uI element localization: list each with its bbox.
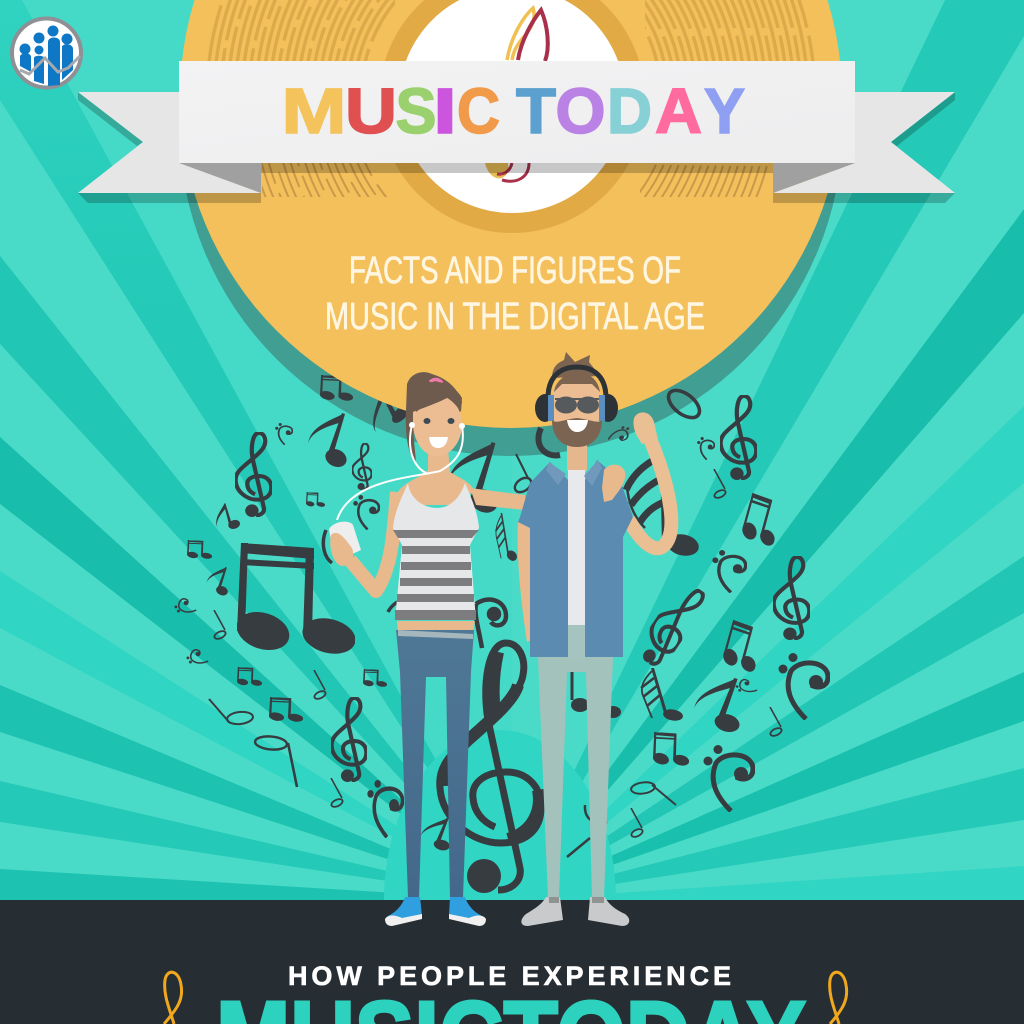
woman holding arm	[350, 492, 397, 591]
subtitle	[325, 250, 705, 338]
record label ring	[379, 0, 645, 233]
note: hollow right	[713, 469, 727, 499]
note: triple flag centre	[496, 513, 517, 562]
oval note over record edge	[664, 385, 704, 423]
note: tiny beamed	[305, 492, 326, 508]
title: A	[655, 75, 702, 147]
note: large flag centre	[448, 442, 501, 517]
note: beamed right	[738, 492, 786, 549]
man beard	[552, 418, 602, 447]
logo mark lower half	[485, 163, 529, 181]
woman neck and chest	[398, 448, 474, 505]
note: hollow behind shoulder	[512, 454, 534, 495]
icon: tiny bass clef rotated	[173, 596, 199, 618]
woman hair fringe	[416, 382, 462, 412]
phone	[329, 522, 361, 556]
left orange clef	[164, 972, 182, 1024]
subtitle line 1: FACTS AND FIGURES OF	[349, 250, 681, 292]
woman smile	[429, 437, 448, 448]
icon: tiny bass clef rotated lower	[185, 647, 211, 669]
title: D	[607, 75, 652, 147]
title: O	[556, 75, 606, 147]
note: near phone	[323, 530, 406, 612]
man neck	[567, 440, 587, 482]
title: T	[516, 75, 556, 147]
man t-shirt	[568, 470, 585, 626]
shirt collars	[546, 460, 602, 486]
note: beamed near woman	[362, 669, 388, 688]
trouser front	[568, 625, 585, 660]
note: hollow far right	[769, 707, 783, 737]
woman shoe right	[449, 897, 484, 923]
woman eyes	[424, 418, 454, 424]
note: beamed lower right	[651, 732, 690, 767]
headphone blue pads	[548, 395, 605, 421]
woman tank top	[393, 483, 479, 620]
note: large beamed notes	[232, 543, 359, 659]
note: hollow	[313, 670, 327, 700]
icon: bass clef near wire	[353, 495, 379, 529]
note: flag under record	[360, 385, 416, 443]
people icons	[20, 26, 73, 86]
woman shoe right sole	[449, 914, 486, 926]
tank stripes	[393, 530, 479, 620]
ribbon main panel	[179, 61, 855, 163]
man trousers	[538, 640, 613, 898]
man face	[553, 381, 600, 440]
vinyl record drop shadow	[179, 0, 843, 456]
icon: bass clef lower left	[367, 780, 403, 837]
man hair fringe	[554, 374, 600, 392]
ribbon notch shadows	[78, 92, 955, 146]
right orange clef	[830, 972, 847, 1024]
icon: treble clef right top	[721, 396, 756, 480]
man smile	[567, 420, 588, 432]
shoes	[385, 897, 629, 926]
icon: treble clef lower left	[332, 698, 366, 782]
man hair	[552, 352, 600, 378]
earphone wires	[337, 425, 463, 520]
note: hollow lowest right	[630, 808, 644, 838]
man raised hand	[633, 412, 658, 444]
man shirt left	[518, 462, 568, 657]
man shoe left	[521, 897, 563, 926]
man figure	[518, 352, 671, 898]
icon: small treble clef	[352, 444, 372, 490]
note: arcs behind head	[538, 428, 560, 455]
music notes cloud	[173, 375, 828, 893]
man shoe right	[588, 897, 629, 926]
icon: bass clef lower right	[704, 745, 753, 811]
note: small beamed top left	[319, 375, 354, 402]
note: flag right	[694, 678, 743, 735]
ribbon right tail	[773, 92, 955, 193]
woman shoe left sole	[385, 914, 422, 926]
note: beamed mid	[267, 697, 304, 723]
subtitle line 2: MUSIC IN THE DIGITAL AGE	[325, 296, 705, 338]
icon: bass clef centre	[475, 600, 506, 648]
man ankles	[549, 897, 604, 903]
title: Y	[704, 75, 745, 147]
record label centre	[399, 0, 625, 213]
note: hollow wide lower right	[630, 781, 676, 805]
note: eighth left	[308, 413, 350, 470]
woman arm to man's shoulder	[470, 488, 525, 510]
headphone band	[548, 367, 606, 398]
woman hand on shoulder	[602, 465, 625, 502]
note: flag left	[207, 567, 229, 597]
icon: tiny bass clef	[275, 423, 292, 445]
icon: bass clef right	[712, 550, 746, 592]
woman waist	[397, 621, 475, 632]
note: hollow small	[213, 610, 227, 640]
note: between man's legs	[571, 672, 621, 718]
logo mark upper half	[507, 8, 548, 61]
man left arm	[518, 522, 531, 642]
title: C	[457, 75, 500, 147]
icon: treble clef left	[236, 433, 271, 517]
icon: tiny bass clef rotated right	[734, 677, 759, 697]
man shirt right	[585, 460, 633, 657]
title: I	[433, 75, 457, 147]
woman face	[413, 398, 462, 456]
icon: treble clef far right	[774, 557, 809, 640]
note: between woman's legs	[421, 818, 452, 852]
woman figure	[329, 372, 525, 898]
icon: tiny bass clef right	[697, 437, 714, 460]
icon: bass clef far right	[778, 653, 828, 719]
ribbon left fold	[179, 163, 261, 193]
note: large triple flag behind arm	[626, 455, 701, 559]
earbuds	[409, 422, 465, 429]
ribbon left tail	[78, 92, 261, 193]
woman belt	[398, 630, 473, 639]
note: hollow wide	[209, 699, 254, 725]
bottom heading: HOW PEOPLE EXPERIENCE	[288, 961, 731, 991]
note: triple flag right	[641, 668, 684, 722]
woman hair back	[406, 372, 462, 462]
title: M	[282, 75, 346, 147]
icon: large central treble clef	[440, 643, 541, 893]
woman hand	[330, 533, 353, 566]
hair band	[430, 379, 442, 383]
note: right of man's legs	[567, 805, 607, 857]
title: S	[396, 75, 436, 147]
title: U	[345, 75, 397, 147]
logo badge	[12, 18, 81, 88]
sunglasses	[555, 396, 599, 414]
chart line	[20, 56, 80, 74]
bottom dark band	[0, 900, 1024, 1024]
note: hollow with long stem	[254, 735, 297, 787]
record grooves	[208, 0, 814, 61]
earcups	[535, 394, 618, 422]
ribbon under-shadow	[78, 163, 955, 203]
note: tiny beamed left	[186, 540, 213, 560]
ribbon banner	[78, 61, 955, 203]
ribbon right fold	[773, 163, 855, 193]
title	[282, 75, 745, 147]
note: beamed far right	[719, 619, 766, 675]
icon: tiny bass clef by hand	[606, 424, 632, 445]
icon: treble clef rotated	[633, 579, 710, 671]
note: hollow lower	[330, 778, 344, 808]
woman shoe left	[386, 897, 422, 923]
note: tiny flag	[208, 501, 244, 538]
woman jeans	[396, 630, 474, 898]
lower record grooves	[262, 163, 768, 197]
man raised arm	[630, 432, 671, 548]
note: beamed small	[236, 667, 263, 687]
vinyl record	[180, 0, 842, 428]
